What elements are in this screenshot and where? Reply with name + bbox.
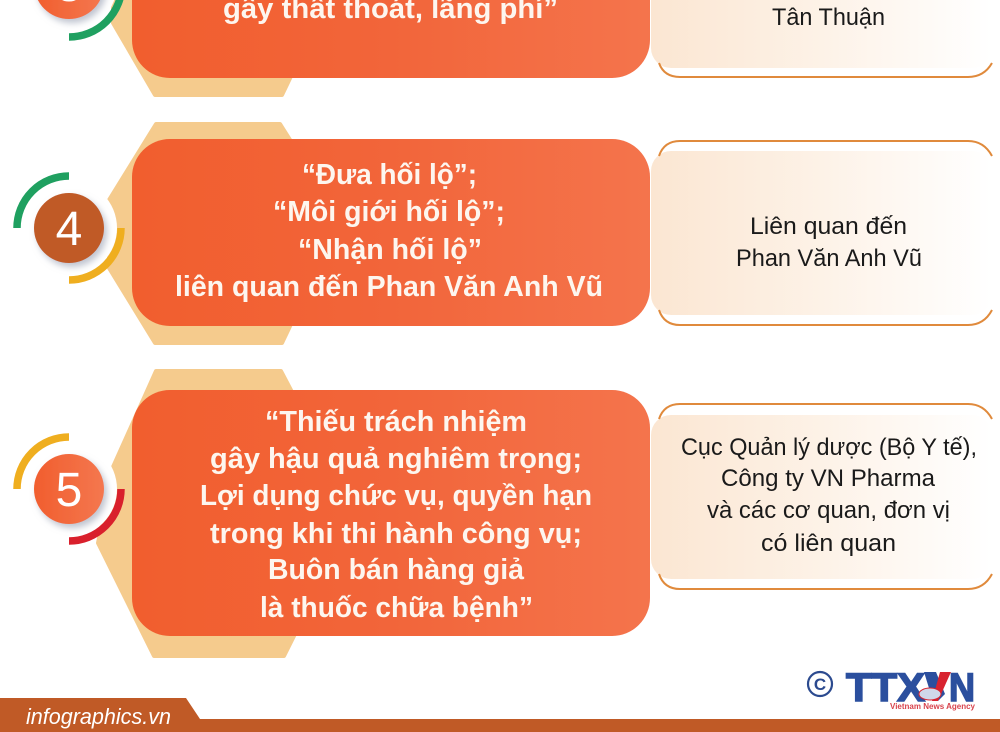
number badge 5 — [17, 437, 121, 541]
detail box 3: Tân Thuận — [772, 4, 885, 31]
heading text 5: “Thiếu trách nhiệm — [265, 406, 527, 438]
copyright mark: C — [814, 675, 826, 694]
detail box 4: Liên quan đến — [750, 213, 907, 240]
backing hexagon 4 — [109, 124, 292, 343]
heading text 5: trong khi thi hành công vụ; — [210, 518, 582, 550]
number badge 4: 4 — [56, 203, 82, 256]
detail box 5: và các cơ quan, đơn vị — [707, 497, 950, 524]
number badge 3 — [21, 0, 122, 37]
heading text 4 — [175, 159, 603, 303]
heading text 5: Lợi dụng chức vụ, quyền hạn — [200, 480, 592, 512]
heading text 5 — [200, 406, 592, 624]
copyright mark — [808, 672, 832, 696]
logo: TTXVN — [808, 666, 976, 711]
detail box 3 — [651, 0, 992, 77]
detail box 5 — [651, 404, 992, 589]
panel: item 5 — [17, 371, 992, 656]
wordmark: N — [949, 666, 975, 710]
heading text 5: Buôn bán hàng giả — [268, 554, 525, 586]
backing hexagon 3 — [113, 0, 294, 95]
panel: item 3 — [21, 0, 992, 95]
heading box 3 — [132, 0, 650, 78]
wordmark — [846, 666, 975, 710]
panel: item 4 — [17, 124, 992, 343]
heading text 5: gây hậu quả nghiêm trọng; — [210, 443, 582, 475]
number badge 4 — [17, 176, 121, 280]
heading text 4: liên quan đến Phan Văn Anh Vũ — [175, 271, 603, 303]
heading box 4 — [132, 139, 650, 326]
footer source text: infographics.vn — [26, 704, 171, 729]
detail box 4: Phan Văn Anh Vũ — [736, 245, 922, 272]
heading box 5 — [132, 390, 650, 636]
backing hexagon 5 — [98, 371, 296, 656]
heading text 5: là thuốc chữa bệnh” — [260, 592, 533, 624]
heading text 4: “Môi giới hối lộ”; — [273, 196, 505, 228]
heading text 4: “Nhận hối lộ” — [298, 234, 482, 266]
wordmark: TTX — [846, 666, 925, 710]
detail box 5: có liên quan — [761, 530, 896, 557]
number badge 5: 5 — [56, 464, 82, 517]
heading text 4: “Đưa hối lộ”; — [302, 159, 477, 191]
footer bar — [0, 698, 1000, 732]
detail box 4 — [651, 141, 992, 325]
detail box 5: Công ty VN Pharma — [721, 465, 935, 492]
tagline: Vietnam News Agency — [890, 702, 976, 711]
detail box 5: Cục Quản lý dược (Bộ Y tế), — [681, 434, 977, 461]
